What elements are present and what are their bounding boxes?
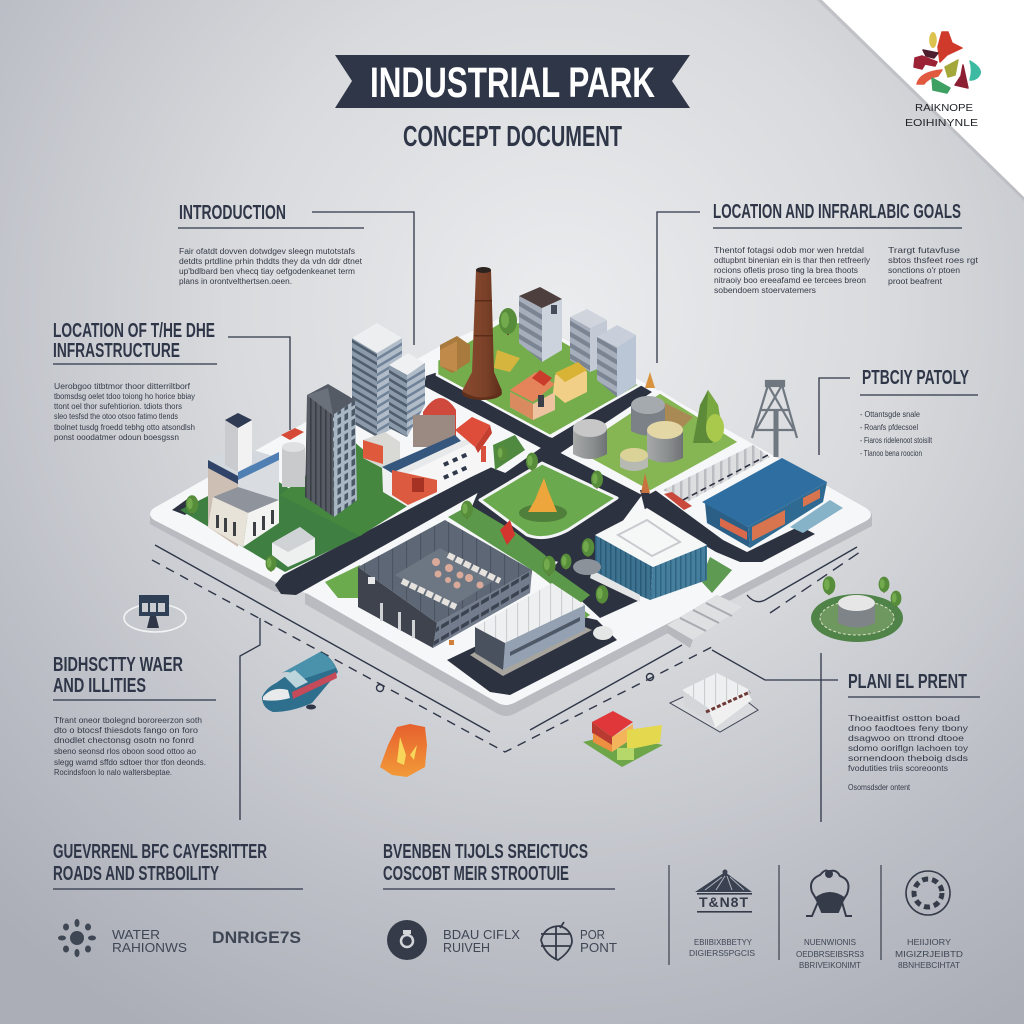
- red house on lawn: [583, 711, 663, 767]
- twin grey blocks: [570, 309, 636, 397]
- icon: valve: [387, 920, 427, 960]
- section: roads and stability: [53, 841, 303, 957]
- section: concept structure: RUIVEH: [443, 940, 490, 955]
- section: biodiversity water and utilities: dto o btocsf thiesdots fango on foro: [54, 725, 198, 735]
- icon: ring: [906, 871, 950, 915]
- tank field lawn: [573, 392, 740, 492]
- grey tower with dark roof: [519, 287, 562, 362]
- train: [262, 652, 338, 712]
- section: location of infrastructure: INFRASTRUCTURE: [53, 340, 180, 362]
- storage tanks: [573, 396, 683, 471]
- section: introduction: detdts prtdline prhin thddts they da vdn ddr dtnet: [179, 256, 363, 266]
- logo text: EOIHINYNLE: [905, 117, 978, 129]
- bottom right icon column 1: [669, 865, 755, 965]
- connector: location and goals: [657, 212, 700, 363]
- section: location of infrastructure: LOCATION OF T/HE DHE: [53, 320, 215, 342]
- section: location of infrastructure: ponst ooodatmer odoun boesgssn: [54, 432, 179, 442]
- section: plan element: dsagwoo on ttrond dtooe: [848, 733, 964, 743]
- section: biodiversity water and utilities: Tfrant oneor tbolegnd bororeerzon soth: [54, 715, 202, 725]
- bottom right icon column 2: OEDBRSEIBSRS3: [796, 949, 864, 959]
- white roof warehouse: [449, 583, 613, 676]
- round park with tank: [811, 576, 903, 642]
- connector: policy: [819, 378, 850, 455]
- bottom right icon column 3: HEIIJIORY: [907, 937, 951, 947]
- logo text: RAIKNOPE: [915, 102, 973, 114]
- small house near chimney: [440, 308, 517, 373]
- route lines: [152, 545, 860, 752]
- section: location of infrastructure: ttont oel thor sufehtiorion. tdiots thors: [54, 401, 182, 411]
- section: biodiversity water and utilities: slegg wamd sffdo sdtoer thor tfon deonds.: [54, 757, 206, 767]
- storage silo behind: [281, 428, 305, 487]
- title banner: INDUSTRIAL PARK: [370, 59, 655, 107]
- section: location and goals: rocions ofletis proso ting la brea thoots: [714, 265, 858, 275]
- logo text: [905, 102, 978, 129]
- section: policy: - Ottantsgde snale: [860, 409, 920, 419]
- office tower group: [352, 323, 425, 437]
- section: plan element: dnoo faodtoes feny tbony: [848, 723, 969, 733]
- section: location of infrastructure: Uerobgoo titbtmor thoor ditterriltborf: [54, 381, 191, 391]
- section: concept structure: [383, 841, 617, 960]
- section: introduction: plans in orontvelthertsen.oeen.: [179, 276, 292, 286]
- section: roads and stability: RAHIONWS: [112, 940, 187, 955]
- section: introduction: [178, 202, 364, 286]
- bottom right icon column 3: MIGIZRJEIBTD: [895, 949, 963, 959]
- section: concept structure: PONT: [580, 940, 617, 955]
- section: location and goals: Trargt futavfuse: [888, 245, 960, 255]
- bottom right icon column 3: 8BNHEBCIHTAT: [898, 960, 960, 970]
- section: biodiversity water and utilities: dnodlet chectonsg osotn no fonrd: [54, 735, 194, 745]
- section: location and goals: sonctions o'r ptoen: [888, 265, 960, 275]
- section: roads and stability: WATER: [112, 927, 160, 942]
- connector: utilities: [240, 618, 260, 820]
- section: introduction: INTRODUCTION: [179, 202, 286, 224]
- section: plan element: fvodutities triis scoreoonts: [848, 763, 948, 773]
- section: location and goals: odtupbnt binenian ein is thar then retfreerly: [714, 255, 871, 265]
- section: roads and stability: ROADS AND STRBOILITY: [53, 863, 219, 885]
- section: biodiversity water and utilities: AND ILLITIES: [53, 675, 146, 697]
- isometric industrial park map: [150, 267, 872, 716]
- blue warehouse: [702, 458, 843, 548]
- white civic building: [208, 413, 279, 547]
- bottom right icon column 1: DIGIERS5PGCIS: [689, 948, 755, 958]
- white roof blue building: [573, 508, 707, 602]
- colorful small buildings: [494, 350, 587, 420]
- grey depot icon: [670, 673, 758, 732]
- section: plan element: sornendoon theboig dsds: [848, 753, 968, 763]
- connector: infrastructure: [228, 337, 290, 430]
- section: plan element: PLANI EL PRENT: [848, 671, 967, 693]
- subtitle: CONCEPT DOCUMENT: [403, 121, 622, 153]
- bottom right icon column 3: [881, 865, 963, 970]
- bottom right icon column 2: BBRIVEIKONIMT: [799, 960, 861, 970]
- section: biodiversity water and utilities: BIDHSCTTY WAER: [53, 654, 183, 676]
- bridge: [667, 595, 743, 648]
- section: policy: - Roanfs pfdecsoel: [860, 422, 918, 432]
- section: plan element: [848, 671, 980, 792]
- roads: [172, 372, 815, 695]
- section: location and goals: [713, 201, 979, 295]
- section: location of infrastructure: tbomsdsg oelet tdoo toiong ho horice bbiay: [54, 391, 196, 401]
- connector: plan element: [712, 650, 838, 822]
- section: concept structure: BDAU CIFLX: [443, 927, 520, 942]
- section: location of infrastructure: sleo tesfsd the otoo otsoo fatimo tlends: [54, 411, 178, 421]
- top lawn: [437, 322, 640, 436]
- section: biodiversity water and utilities: Rocindsfoon Io nalo waltersbeptae.: [54, 767, 172, 777]
- section: location of infrastructure: [53, 320, 217, 442]
- section: location and goals: sobendoem stoervatemers: [714, 285, 816, 295]
- connector: introduction: [312, 212, 414, 345]
- corner fold with logo: [817, 0, 1024, 201]
- section: policy: - Tlanoo bena roocion: [860, 448, 922, 458]
- green trees by tanks: [641, 372, 724, 493]
- title banner: [335, 55, 690, 108]
- section: location of infrastructure: tbolnet tusdg froedd tebhg otto atsondlsh: [54, 422, 195, 432]
- section: biodiversity water and utilities: [53, 654, 216, 777]
- small utility box: [186, 495, 315, 572]
- red and white plant: [363, 398, 492, 507]
- chimney: [462, 267, 502, 400]
- bottom right icon column 1: EBIIBIXBBETYY: [694, 937, 752, 947]
- section: introduction: up'bdlbard ben vhecq tiay oefgodenkeanet term: [179, 266, 355, 276]
- section: location and goals: Thentof fotagsi odob mor wen hretdal: [714, 245, 864, 255]
- section: location and goals: proot beafrent: [888, 276, 943, 286]
- section: plan element: Osomsdsder ontent: [848, 782, 911, 792]
- bottom right icon column 2: NUENWIONIS: [804, 937, 856, 947]
- transmission tower: [752, 381, 797, 457]
- logo mark: [914, 32, 980, 93]
- icon: hall: T&N8T: [699, 894, 748, 910]
- section: policy: - Fiaros ridelenoot stoisilt: [860, 435, 932, 445]
- central lawn: [480, 463, 617, 538]
- large dark factory: [358, 520, 532, 648]
- trees along central road: [461, 446, 608, 604]
- section: plan element: Thoeaitfist ostton boad: [848, 713, 960, 723]
- icon: sun: [58, 919, 96, 957]
- section: location and goals: sbtos thsfeet roes rgt: [888, 255, 979, 265]
- fire icon: [380, 724, 427, 777]
- section: introduction: Fair ofatdt dovven dotwdgev sleegn mutotstafs: [179, 246, 355, 256]
- section: concept structure: POR: [580, 927, 605, 942]
- section: plan element: sdomo ooriflgn lachoen toy: [848, 743, 969, 753]
- section: policy: PTBCIY PATOLY: [862, 367, 969, 389]
- section: roads and stability: DNRIGE7S: [212, 928, 301, 947]
- dark tower: [305, 384, 357, 517]
- section: policy: [860, 367, 978, 458]
- bottom right icon column 2: [779, 865, 864, 970]
- parking stripes: [663, 445, 770, 510]
- lawns: [180, 435, 732, 625]
- icon: globe: [541, 922, 572, 960]
- section: concept structure: COSCOBT MEIR STROOTUIE: [383, 863, 569, 885]
- concrete slab: [150, 318, 872, 716]
- section: location and goals: nitraoiy boo ereeafamd ee tercees breon: [714, 275, 866, 285]
- icon: crest: [806, 871, 852, 916]
- section: roads and stability: GUEVRRENL BFC CAYESRITTER: [53, 841, 267, 863]
- sign marker icon: [124, 595, 186, 632]
- section: concept structure: BVENBEN TIJOLS SREICTUCS: [383, 841, 588, 863]
- section: biodiversity water and utilities: sbeno seonsd rlos oboon sood ottoo ao: [54, 746, 196, 756]
